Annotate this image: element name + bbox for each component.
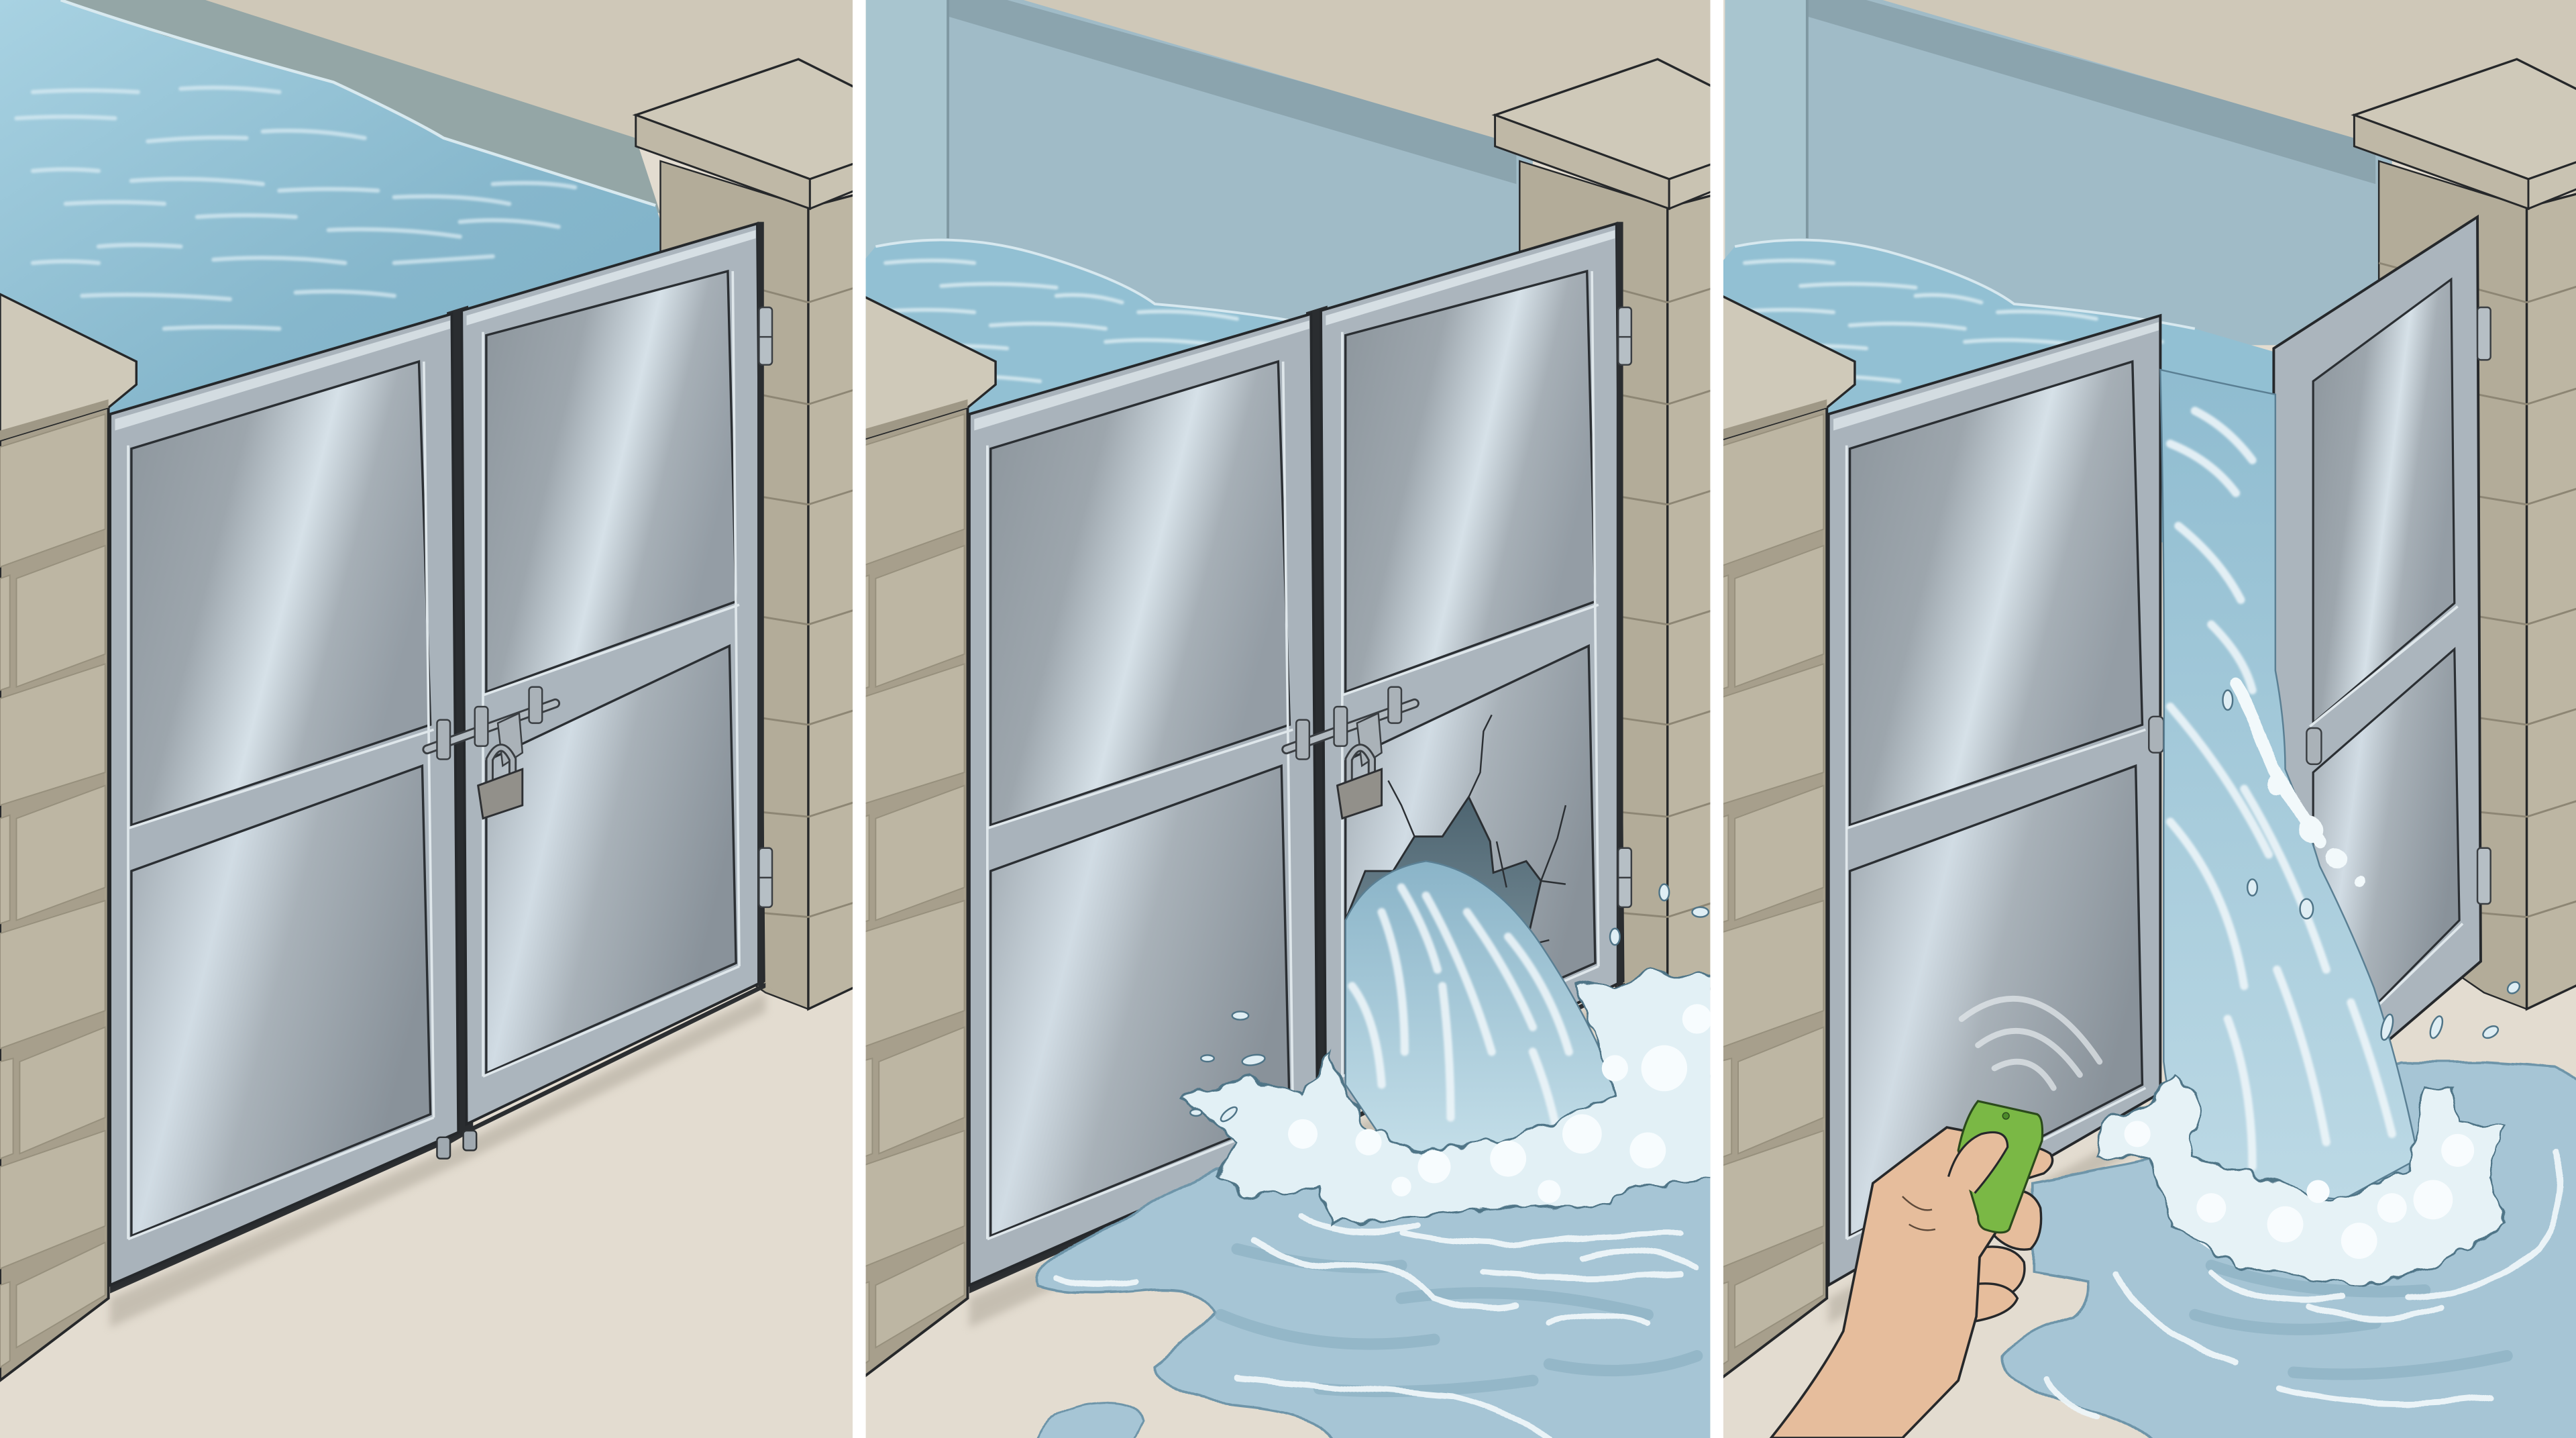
receding water behind gate — [865, 0, 1533, 444]
gate backing and floor shadow — [969, 306, 1625, 1328]
gate hasps — [2149, 717, 2321, 764]
right stone pillar — [2354, 59, 2576, 1009]
puddle — [2001, 1062, 2576, 1438]
signal arcs — [1962, 998, 2100, 1088]
panel 1: locked gate holding water — [0, 0, 871, 1438]
left stone wall — [0, 294, 136, 1380]
left stone wall — [1719, 294, 1855, 1380]
water jet through gate — [1346, 861, 1618, 1167]
gate foot pins — [437, 1131, 476, 1159]
foam splash — [2100, 690, 2522, 1287]
panel 2: gate ruptured — [859, 0, 1746, 1438]
hand holding remote — [1771, 1101, 2053, 1438]
panel 3: remote opens gate — [1719, 0, 2576, 1438]
hinges — [759, 307, 772, 907]
remote fob — [1958, 1101, 2043, 1233]
padlock and latch — [1287, 687, 1415, 819]
gate: right leaf — [1321, 222, 1623, 1124]
foam splash — [1181, 884, 1730, 1223]
ruptured hole in gate — [1346, 715, 1566, 1051]
receding water behind gate — [1719, 0, 2576, 542]
water stream through opening — [2160, 370, 2418, 1200]
hinges — [1618, 307, 1631, 907]
gate: open right leaf — [2273, 217, 2481, 1134]
padlock and latch — [427, 687, 555, 819]
left stone wall — [859, 294, 996, 1380]
right stone pillar — [1495, 59, 1730, 1009]
right stone pillar — [636, 59, 871, 1009]
gate: left leaf — [110, 314, 458, 1285]
gate: left leaf — [969, 314, 1318, 1285]
gate: right leaf — [462, 222, 764, 1124]
gate backing and floor shadow — [110, 306, 765, 1328]
gate: left leaf — [1829, 315, 2160, 1325]
hinges — [2477, 307, 2491, 904]
water pool behind the gate — [0, 0, 674, 427]
puddle — [1036, 1068, 1746, 1438]
